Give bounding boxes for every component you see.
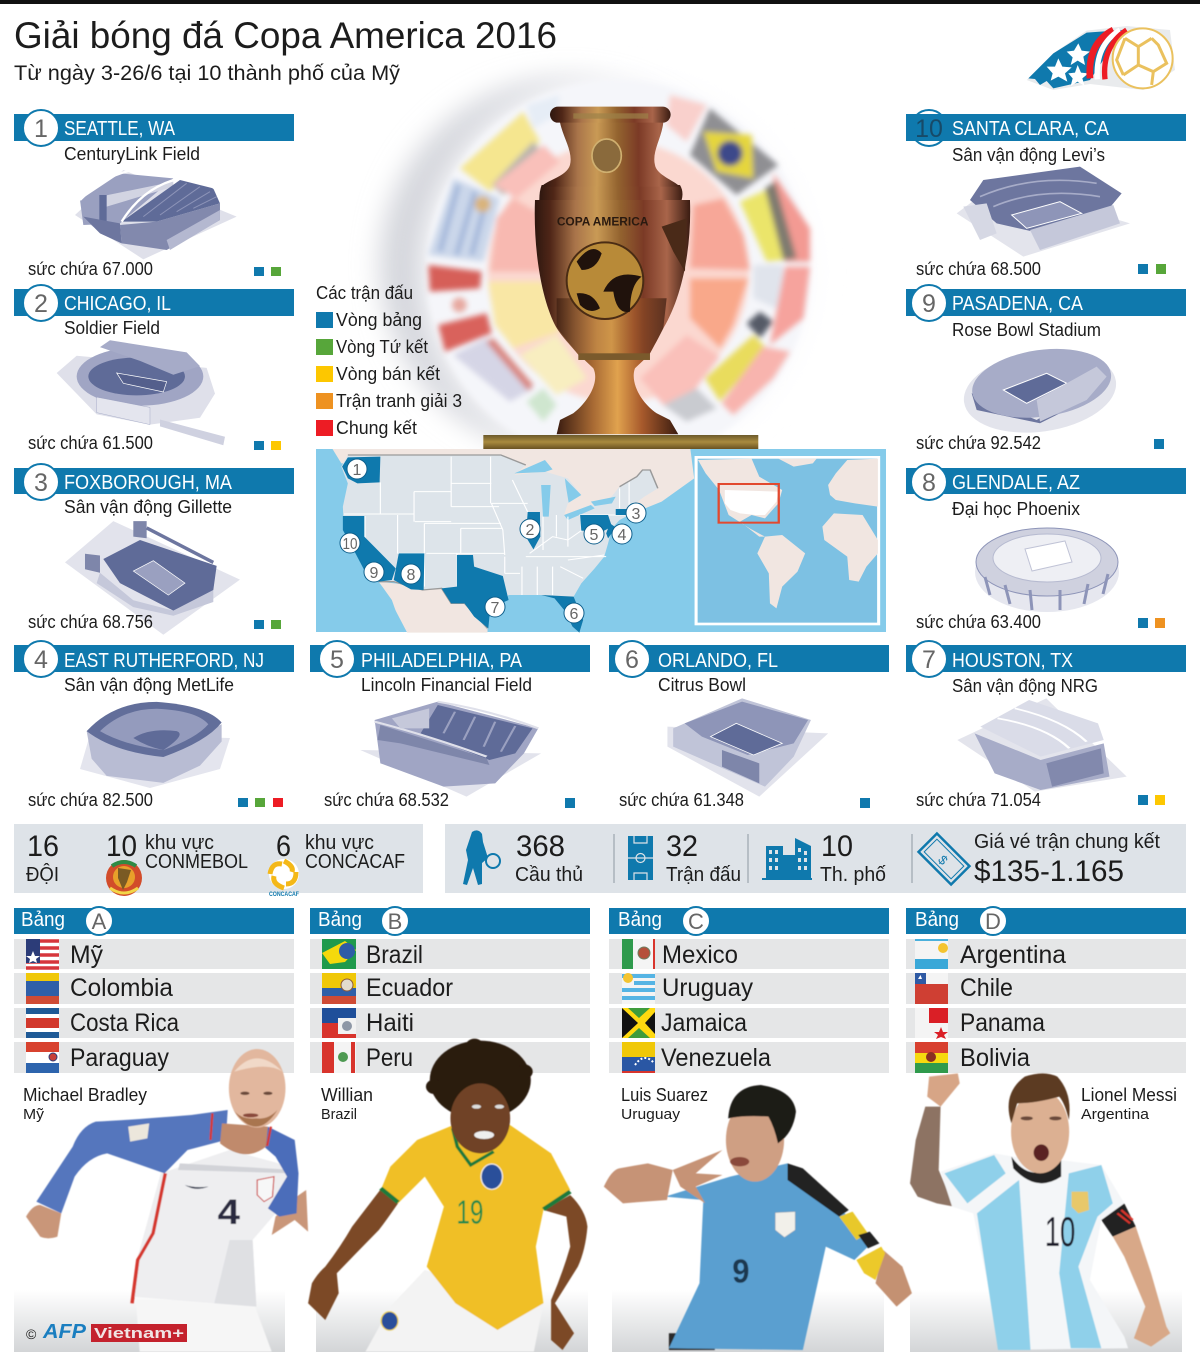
icon: football pitch <box>628 836 653 880</box>
player: Lionel Messi: 10 <box>1045 1208 1075 1255</box>
panel: city 2 Chicago: sức chứa 61.500 <box>28 433 153 453</box>
panel: city 9 Pasadena <box>906 285 1186 453</box>
icon: CONMEBOL logo <box>106 860 142 896</box>
panel: city 1 Seattle: sức chứa 67.000 <box>28 259 153 279</box>
icon: MetLife Stadium <box>80 702 230 788</box>
map markers 1 to 10 <box>340 459 646 623</box>
panel: group B: Ecuador <box>366 974 453 1002</box>
panel: teams and confederations: 10 <box>106 830 137 863</box>
panel: city 10 Santa Clara: Sân vận động Levi’s <box>952 145 1105 165</box>
panel: city 8 Glendale: 8 <box>922 469 936 497</box>
panel: city 9 Pasadena: 9 <box>922 290 936 318</box>
map markers 1 to 10: 6 <box>570 606 579 623</box>
subtitle: Từ ngày 3-26/6 tại 10 thành phố của Mỹ <box>14 62 401 85</box>
icon: Levi's Stadium <box>957 167 1130 257</box>
panel: teams and confederations <box>14 824 423 898</box>
icon: flag Mexico <box>622 939 655 969</box>
panel: group B: Peru <box>366 1044 413 1072</box>
legend: match rounds: Vòng Tứ kết <box>336 337 428 357</box>
icon: flag Colombia <box>26 973 59 1004</box>
map markers 1 to 10: 10 <box>342 536 358 553</box>
panel: city 6 Orlando: sức chứa 61.348 <box>619 790 744 810</box>
icon: Soldier Field stadium <box>57 340 225 445</box>
map markers 1 to 10: 7 <box>491 600 500 617</box>
panel: city 7 Houston: sức chứa 71.054 <box>916 790 1041 810</box>
label: Luis Suarez <box>621 1085 708 1123</box>
panel: city 6 Orlando: 6 <box>625 646 639 674</box>
panel: city 4 East Rutherford <box>14 641 294 810</box>
panel: city 10 Santa Clara: sức chứa 68.500 <box>916 259 1041 279</box>
player: Michael Bradley <box>26 1049 308 1352</box>
panel: group A: A <box>92 909 107 934</box>
map markers 1 to 10: 1 <box>353 462 362 479</box>
panel: city 6 Orlando <box>609 641 889 810</box>
panel: group C: Bảng <box>618 909 662 931</box>
panel: city 2 Chicago: 2 <box>34 290 48 318</box>
panel: city 6 Orlando: Citrus Bowl <box>658 675 746 695</box>
icon: CONCACAF logo <box>269 859 299 898</box>
panel: group D <box>906 907 1186 1073</box>
credit: AFP Vietnam+ <box>26 1321 187 1343</box>
panel: city 6 Orlando: ORLANDO, FL <box>658 650 778 672</box>
panel: teams and confederations: CONCACAF <box>305 851 405 873</box>
icon: Lincoln Financial Field <box>360 702 541 797</box>
label: Lionel Messi: Argentina <box>1081 1106 1150 1123</box>
panel: city 7 Houston: HOUSTON, TX <box>952 650 1073 672</box>
icon: CenturyLink Field stadium <box>75 169 237 259</box>
panel: tournament figures: Giá vé trận chung kết <box>974 831 1160 853</box>
label: Michael Bradley <box>23 1085 147 1123</box>
player: Luis Suarez: 9 <box>732 1253 749 1290</box>
panel: group A: Mỹ <box>70 941 103 969</box>
icon: flag Jamaica <box>622 1008 655 1038</box>
panel: city 4 East Rutherford: EAST RUTHERFORD, NJ <box>64 650 264 672</box>
panel: city 3 Foxborough: sức chứa 68.756 <box>28 612 153 632</box>
icon: flag Paraguay <box>26 1042 59 1073</box>
panel: city 9 Pasadena: PASADENA, CA <box>952 293 1084 315</box>
panel: tournament figures: Cầu thủ <box>515 864 583 886</box>
panel: city 7 Houston: 7 <box>922 646 936 674</box>
panel: tournament figures: 10 <box>821 830 853 863</box>
icon: flag Bolivia <box>915 1042 948 1073</box>
panel: group D: Bolivia <box>960 1044 1030 1072</box>
panel: city 1 Seattle: 1 <box>34 115 48 143</box>
panel: teams and confederations: CONMEBOL <box>145 851 248 873</box>
panel: city 3 Foxborough: FOXBOROUGH, MA <box>64 472 233 494</box>
panel: teams and confederations: 6 <box>276 830 291 863</box>
credit: AFP Vietnam+: AFP <box>42 1321 87 1343</box>
panel: city 8 Glendale: GLENDALE, AZ <box>952 472 1080 494</box>
legend: match rounds: Vòng bảng <box>336 310 422 330</box>
panel: city 2 Chicago: CHICAGO, IL <box>64 293 171 315</box>
panel: group B: Haiti <box>366 1009 414 1037</box>
panel: group A: Costa Rica <box>70 1009 179 1037</box>
panel: city 3 Foxborough: Sân vận động Gillette <box>64 497 232 517</box>
panel: city 1 Seattle: SEATTLE, WA <box>64 118 176 140</box>
map markers 1 to 10: 4 <box>618 527 627 544</box>
icon: city buildings <box>762 838 812 880</box>
panel: group D: Panama <box>960 1009 1045 1037</box>
icon: Copa America trophy: COPA AMERICA <box>557 215 649 229</box>
panel: tournament figures: $135-1.165 <box>974 855 1124 888</box>
panel: city 2 Chicago: Soldier Field <box>64 318 160 338</box>
panel: city 10 Santa Clara: 10 <box>915 115 943 143</box>
panel: city 9 Pasadena: sức chứa 92.542 <box>916 433 1041 453</box>
panel: teams and confederations: khu vực <box>145 832 214 854</box>
map markers 1 to 10: 3 <box>632 506 641 523</box>
panel: tournament figures: 32 <box>666 830 698 863</box>
label: Lionel Messi: Lionel Messi <box>1081 1085 1177 1105</box>
icon: ticket banknote: $ <box>935 852 951 868</box>
panel: group C: Mexico <box>662 941 738 969</box>
map markers 1 to 10: 2 <box>526 522 535 539</box>
panel: teams and confederations: 16 <box>27 830 59 863</box>
label: Luis Suarez: Uruguay <box>621 1106 681 1123</box>
panel: city 7 Houston <box>906 641 1186 810</box>
player: Michael Bradley: 4 <box>218 1192 240 1231</box>
panel: city 3 Foxborough: 3 <box>34 469 48 497</box>
panel: tournament figures: Th. phố <box>820 864 886 886</box>
panel: group C: Venezuela <box>661 1044 771 1072</box>
panel: group A: Colombia <box>70 974 173 1002</box>
panel: group D: D <box>985 909 1001 934</box>
icon: ticket banknote <box>919 834 969 884</box>
panel: blurred flag wheel behind trophy <box>380 75 815 468</box>
panel: group D: Bảng <box>915 909 959 931</box>
icon: NRG Stadium <box>957 698 1127 792</box>
icon: Rose Bowl stadium <box>959 341 1121 442</box>
icon: flag Brazil <box>322 939 356 969</box>
label: Michael Bradley: Mỹ <box>23 1106 45 1123</box>
panel: group B: Brazil <box>366 941 423 969</box>
panel: city 10 Santa Clara <box>906 110 1186 279</box>
icon: flag Haiti <box>322 1008 356 1038</box>
map markers 1 to 10: 8 <box>407 567 416 584</box>
panel: group C: C <box>688 909 704 934</box>
icon: Copa America logo <box>1027 26 1175 90</box>
panel: city 5 Philadelphia: sức chứa 68.532 <box>324 790 449 810</box>
panel: group C: Jamaica <box>661 1009 747 1037</box>
icon: University of Phoenix Stadium <box>975 528 1119 612</box>
panel: city 1 Seattle: CenturyLink Field <box>64 144 200 164</box>
legend: match rounds: Các trận đấu <box>316 283 413 303</box>
panel: city 3 Foxborough <box>14 464 294 635</box>
panel: city 2 Chicago <box>14 285 294 453</box>
panel: tournament figures: 368 <box>516 830 565 863</box>
icon: Copa America trophy <box>483 107 758 449</box>
panel: group B: B <box>388 909 402 934</box>
icon: player silhouette <box>463 830 500 885</box>
panel: city 8 Glendale: Đại học Phoenix <box>952 499 1080 519</box>
panel: city 5 Philadelphia: Lincoln Financial Field <box>361 675 532 695</box>
title: Giải bóng đá Copa America 2016 <box>14 15 557 56</box>
panel: city 9 Pasadena: Rose Bowl Stadium <box>952 320 1101 340</box>
panel: photo backgrounds <box>14 1290 1182 1352</box>
panel: city 8 Glendale: sức chứa 63.400 <box>916 612 1041 632</box>
panel: group B <box>310 907 590 1073</box>
legend: match rounds: Vòng bán kết <box>336 364 440 384</box>
icon: flag Costa Rica <box>26 1008 59 1038</box>
icon: flag Chile <box>915 973 948 1004</box>
panel: city 4 East Rutherford: 4 <box>34 646 48 674</box>
panel: group A: Bảng <box>21 909 65 931</box>
label: Willian <box>321 1085 373 1123</box>
player: Lionel Messi <box>910 1073 1170 1350</box>
panel: group A <box>14 907 294 1073</box>
panel: tournament figures: Trận đấu <box>666 864 741 886</box>
panel: group C <box>609 907 889 1073</box>
panel: city 10 Santa Clara: SANTA CLARA, CA <box>952 118 1110 140</box>
label: Lionel Messi <box>1081 1085 1177 1123</box>
icon: flag Argentina <box>915 939 948 969</box>
panel: group B: Bảng <box>318 909 362 931</box>
icon: Gillette Stadium <box>65 521 240 635</box>
credit: AFP Vietnam+: Vietnam+ <box>94 1325 184 1342</box>
icon: flag Venezuela <box>622 1042 655 1073</box>
icon: flag Uruguay <box>622 973 655 1004</box>
label: Luis Suarez: Luis Suarez <box>621 1085 708 1105</box>
panel: city 8 Glendale <box>906 464 1186 632</box>
player: Willian <box>308 1039 587 1352</box>
legend: match rounds: Chung kết <box>336 418 417 438</box>
player: Willian: 19 <box>457 1194 483 1231</box>
map markers 1 to 10: 9 <box>370 565 379 582</box>
label: Willian: Brazil <box>321 1106 357 1123</box>
panel: group D: Argentina <box>960 941 1066 969</box>
icon: flag Peru <box>322 1042 356 1073</box>
icon: flag Ecuador <box>322 973 356 1004</box>
map markers 1 to 10: 5 <box>590 527 599 544</box>
label: Willian: Willian <box>321 1085 373 1105</box>
icon: CONCACAF logo: CONCACAF <box>269 892 299 898</box>
top black bar <box>0 0 1200 4</box>
map: host cities in the USA <box>316 449 886 633</box>
icon: flag USA <box>26 939 59 969</box>
player: Luis Suarez <box>604 1085 912 1350</box>
panel: group D: Chile <box>960 974 1013 1002</box>
legend: match rounds: Trận tranh giải 3 <box>336 391 462 411</box>
panel: teams and confederations: ĐỘI <box>26 863 59 886</box>
icon: Citrus Bowl stadium <box>667 698 828 797</box>
panel: city 1 Seattle <box>14 110 294 279</box>
panel: city 4 East Rutherford: Sân vận động MetLife <box>64 675 234 695</box>
panel: teams and confederations: khu vực <box>305 832 374 854</box>
panel: group C: Uruguay <box>662 974 753 1002</box>
panel: city 4 East Rutherford: sức chứa 82.500 <box>28 790 153 810</box>
panel: city 5 Philadelphia: PHILADELPHIA, PA <box>361 650 523 672</box>
icon: flag Panama <box>915 1008 948 1039</box>
panel: city 7 Houston: Sân vận động NRG <box>952 676 1098 696</box>
panel: city 5 Philadelphia: 5 <box>330 646 344 674</box>
panel: group A: Paraguay <box>70 1044 169 1072</box>
inset: world locator map <box>696 457 879 624</box>
panel: city 5 Philadelphia <box>310 641 590 810</box>
label: Michael Bradley: Michael Bradley <box>23 1085 147 1105</box>
legend: match rounds <box>316 283 462 438</box>
panel: tournament figures <box>445 824 1186 893</box>
credit: AFP Vietnam+: © <box>26 1326 37 1342</box>
